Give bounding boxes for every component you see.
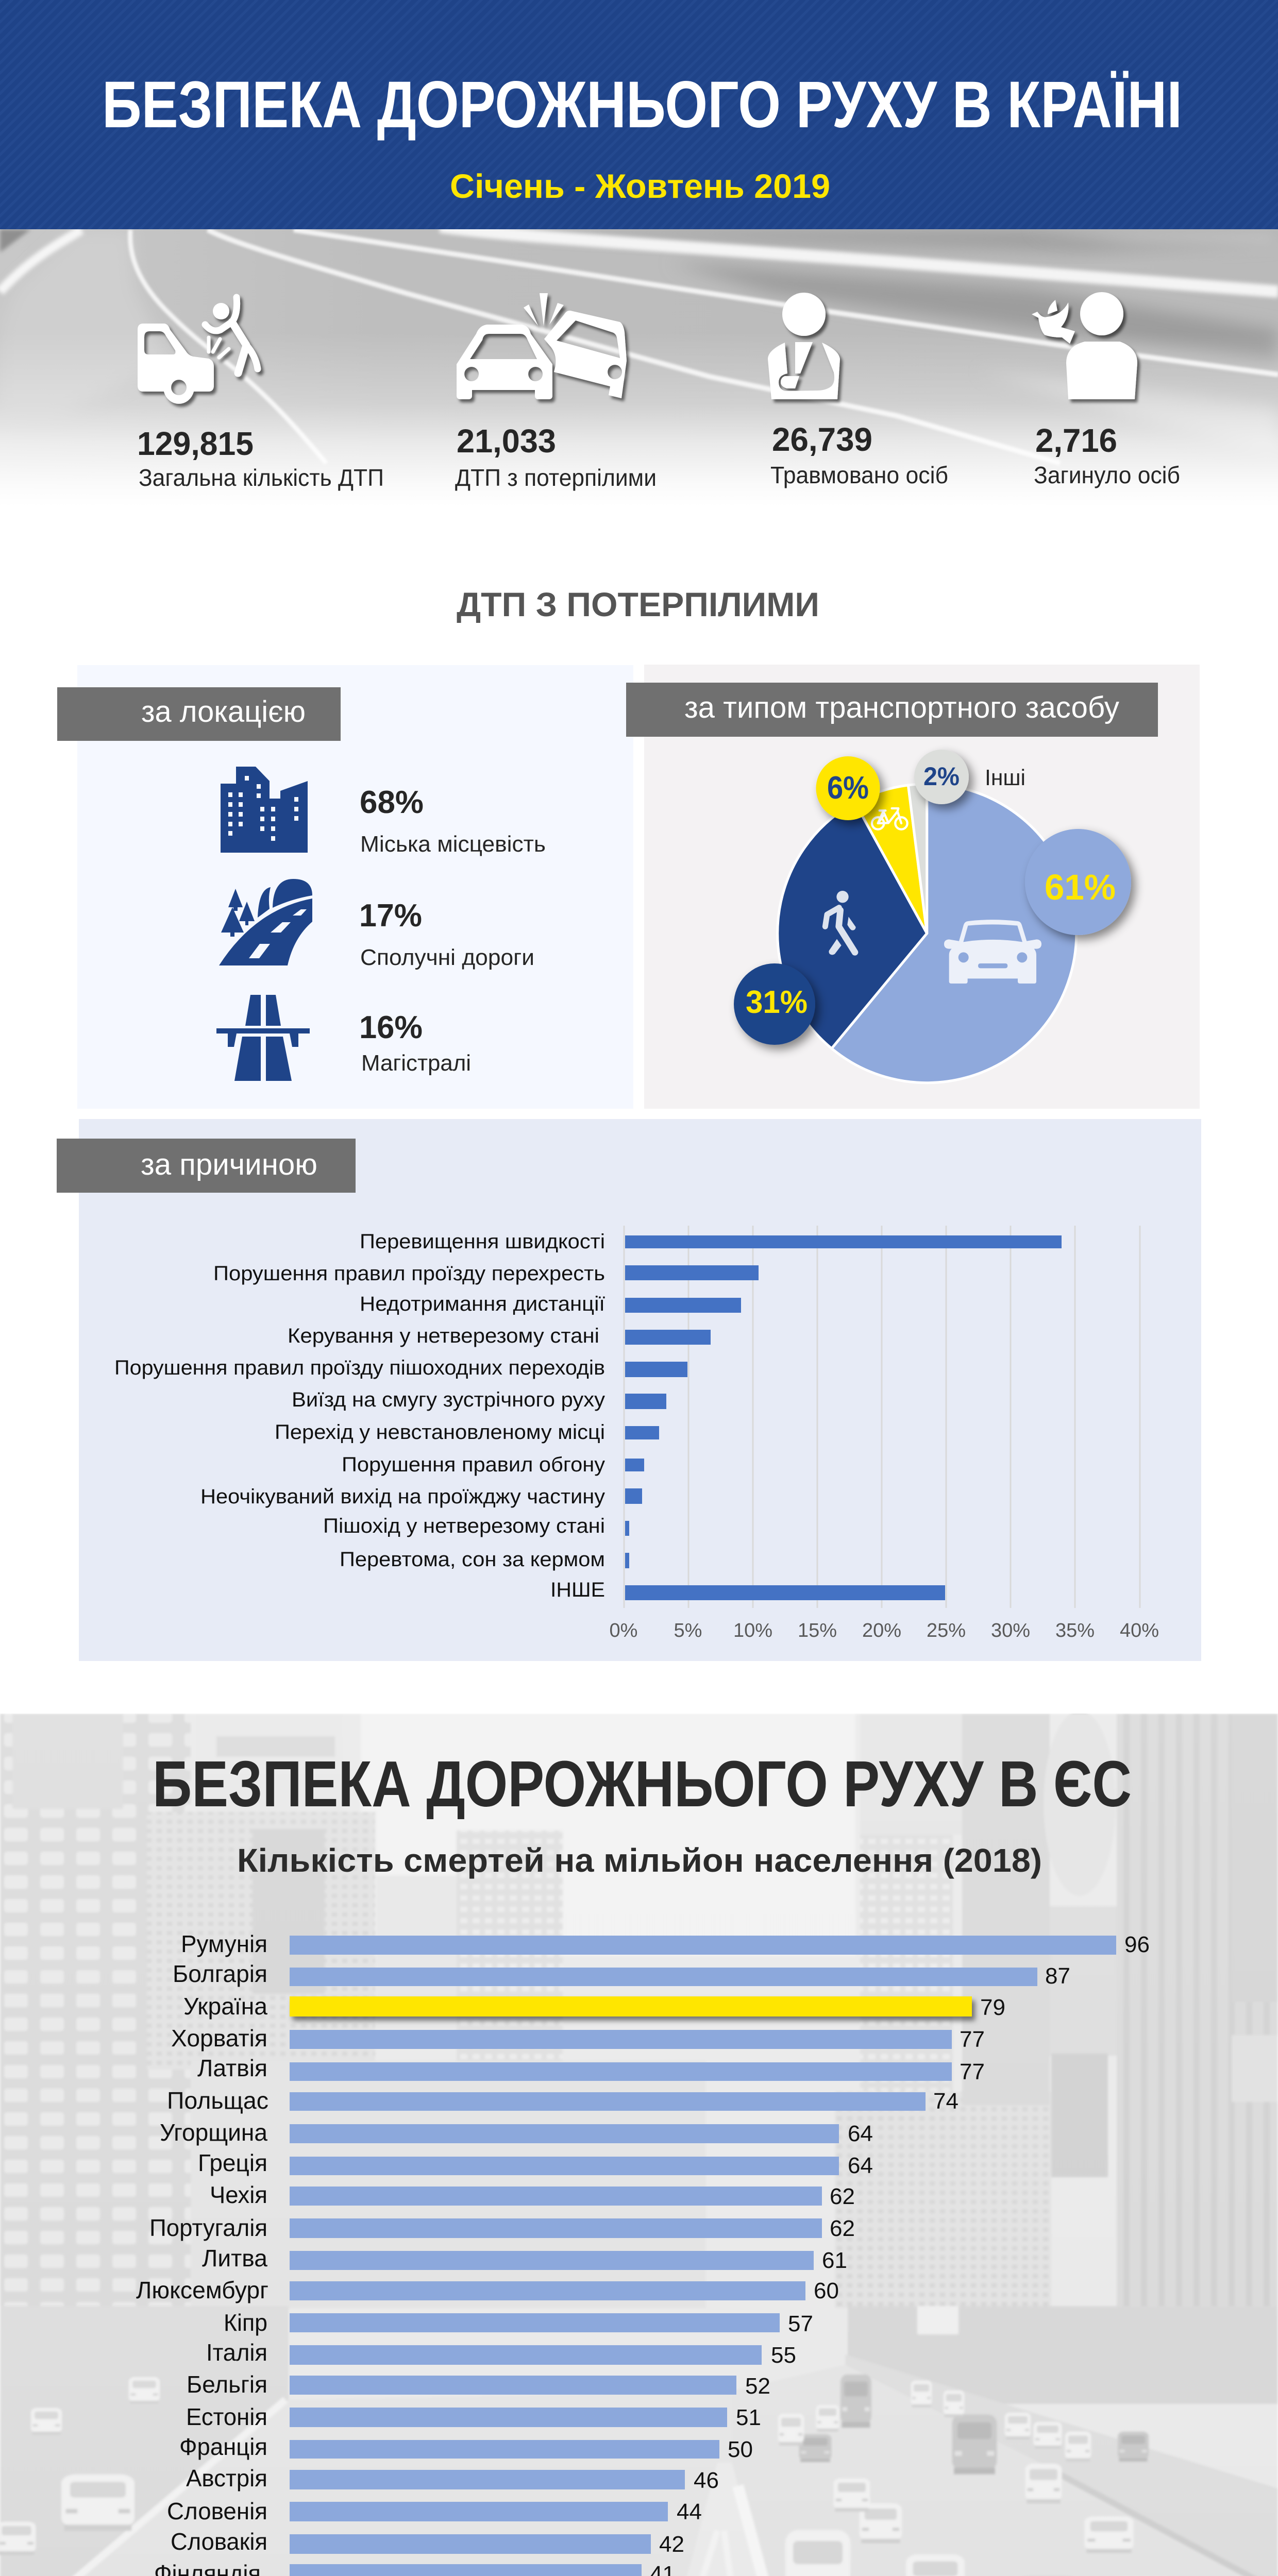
row: Czechia: Чехія bbox=[210, 2181, 267, 2208]
row: Cyprus: Кіпр bbox=[224, 2309, 267, 2336]
row: Greece: 64 bbox=[848, 2153, 873, 2178]
row: Lithuania bbox=[202, 2245, 847, 2273]
bar chart: causes: 10% bbox=[733, 1620, 772, 1641]
row: Bulgaria bbox=[173, 1960, 1070, 1989]
bar chart: causes: 0% bbox=[610, 1620, 637, 1641]
callout: 31% bbox=[734, 963, 815, 1045]
icon: person with arm sling bbox=[768, 293, 840, 399]
bar chart: causes: Керування у нетверезому стані bbox=[288, 1325, 599, 1347]
header banner bbox=[0, 0, 1278, 229]
row: Luxembourg: Люксембург bbox=[136, 2277, 268, 2303]
row: Hungary: Угорщина bbox=[160, 2119, 267, 2146]
pie chart bbox=[778, 784, 1077, 1083]
row: Bulgaria: Болгарія bbox=[173, 1960, 267, 1987]
stat: accidents with victims bbox=[455, 293, 657, 491]
road photo background bbox=[0, 229, 1278, 477]
city photo background bbox=[0, 1710, 1278, 2576]
panel heading bar bbox=[57, 1139, 356, 1193]
row: Belgium: Бельгія bbox=[187, 2371, 267, 2398]
callout: 6% bbox=[816, 756, 880, 820]
number: 26,739 bbox=[772, 421, 872, 458]
bar chart: causes: 20% bbox=[862, 1620, 901, 1641]
caption: ДТП з потерпілими bbox=[455, 464, 657, 491]
number: 2,716 bbox=[1035, 422, 1117, 459]
bar chart: causes: Порушення правил проїзду перехресть bbox=[213, 1262, 605, 1285]
row: Hungary bbox=[160, 2119, 873, 2146]
row: Romania: Румунія bbox=[181, 1930, 267, 1957]
row: Hungary: 64 bbox=[848, 2121, 873, 2146]
bar chart: causes: 15% bbox=[798, 1620, 837, 1641]
stat: total accidents bbox=[137, 297, 384, 491]
panel: by location bbox=[57, 665, 633, 1109]
row: France: Франція bbox=[179, 2433, 267, 2460]
icon: bicycle bbox=[872, 808, 907, 829]
row: Poland: Польщас bbox=[167, 2087, 268, 2114]
row: Austria: 46 bbox=[694, 2468, 719, 2493]
bar chart: causes: Порушення правил обгону bbox=[342, 1453, 605, 1476]
row: Croatia: Хорватія bbox=[171, 2025, 267, 2052]
caption: Загальна кількість ДТП bbox=[139, 464, 384, 491]
bar chart: causes: 35% bbox=[1055, 1620, 1095, 1641]
row: Ukraine: Україна bbox=[183, 1993, 267, 2020]
row: Estonia: Естонія bbox=[186, 2403, 267, 2430]
bar chart: causes: Перевищення швидкості bbox=[360, 1230, 605, 1253]
bar chart: causes: Порушення правил проїзду пішоходних переходів bbox=[114, 1357, 605, 1379]
row: Ukraine: 79 bbox=[980, 1995, 1005, 2020]
caption: Травмовано осіб bbox=[770, 462, 948, 488]
bar chart: causes: ІНШЕ bbox=[550, 1579, 605, 1601]
row: Latvia bbox=[197, 2055, 985, 2084]
row: Italy bbox=[206, 2339, 796, 2368]
row: Croatia bbox=[171, 2025, 985, 2052]
label: urban: Міська місцевість bbox=[360, 832, 546, 857]
panel: by cause bbox=[57, 1119, 1201, 1661]
bar chart: deaths per million bbox=[95, 1930, 1150, 2576]
bar chart: causes: Виїзд на смугу зустрічного руху bbox=[292, 1388, 605, 1411]
caption: Загинуло осіб bbox=[1034, 462, 1180, 488]
bar chart: causes: 30% bbox=[991, 1620, 1030, 1641]
label: connecting roads: Сполучні дороги bbox=[360, 945, 534, 970]
panel heading bar: за причиною bbox=[141, 1148, 317, 1181]
row: Belgium: 52 bbox=[745, 2374, 770, 2399]
row: Latvia: 77 bbox=[960, 2059, 985, 2084]
icon: car bbox=[944, 920, 1041, 984]
bar chart: causes: 25% bbox=[927, 1620, 966, 1641]
stat: deaths bbox=[1032, 292, 1180, 488]
icon: city buildings bbox=[221, 767, 308, 853]
bar chart: causes: Перевтома, сон за кермом bbox=[340, 1548, 605, 1571]
row: Portugal bbox=[149, 2214, 855, 2241]
row: Poland: 74 bbox=[933, 2089, 959, 2114]
label: highways: Магістралі bbox=[361, 1050, 471, 1076]
row: Croatia: 77 bbox=[960, 2027, 985, 2052]
row: Portugal: 62 bbox=[830, 2216, 855, 2241]
row: Luxembourg bbox=[136, 2277, 839, 2303]
row: Estonia bbox=[186, 2403, 761, 2430]
bar chart: causes: Пішохід у нетверезому стані bbox=[323, 1515, 605, 1537]
icon: car hitting pedestrian bbox=[138, 297, 258, 404]
row: Romania: 96 bbox=[1124, 1932, 1150, 1957]
callout: 2%: 2% bbox=[923, 762, 960, 791]
row: Finland bbox=[154, 2560, 675, 2576]
row: Portugal: Португалія bbox=[149, 2214, 267, 2241]
callout: 61% bbox=[1025, 829, 1131, 935]
row: Austria: Австрія bbox=[186, 2465, 267, 2492]
row: France: 50 bbox=[728, 2437, 753, 2462]
row: Greece: Греція bbox=[198, 2149, 267, 2176]
value: connecting roads: 17% bbox=[359, 898, 422, 934]
row: Cyprus: 57 bbox=[788, 2311, 813, 2336]
callout: 61%: 61% bbox=[1045, 867, 1116, 907]
row: France bbox=[179, 2433, 753, 2462]
row: Slovakia: 42 bbox=[659, 2532, 684, 2557]
number: 129,815 bbox=[137, 425, 254, 462]
row: Slovenia bbox=[167, 2498, 702, 2524]
row: Bulgaria: 87 bbox=[1045, 1963, 1070, 1989]
EU chart subtitle: Кількість смертей на мільйон населення (2018) bbox=[237, 1842, 1042, 1879]
stat: injured bbox=[768, 293, 948, 488]
row: Greece bbox=[198, 2149, 873, 2178]
row: Slovenia: 44 bbox=[677, 2499, 702, 2524]
row: Slovakia: Словакія bbox=[171, 2528, 267, 2555]
icon: pedestrian bbox=[825, 891, 856, 955]
section heading: ДТП З ПОТЕРПІЛИМИ bbox=[457, 585, 819, 623]
row: Lithuania: 61 bbox=[822, 2248, 847, 2273]
row: Latvia: Латвія bbox=[197, 2055, 267, 2081]
subtitle: period: Січень - Жовтень 2019 bbox=[450, 167, 830, 205]
icon: two cars crash bbox=[457, 293, 627, 399]
panel heading bar bbox=[626, 683, 1158, 737]
callout: 2% bbox=[914, 750, 969, 804]
icon: highway bbox=[216, 995, 310, 1081]
bar chart: causes bbox=[114, 1226, 1159, 1641]
row: Slovenia: Словенія bbox=[167, 2498, 267, 2524]
row: Czechia bbox=[210, 2181, 855, 2209]
row: Italy: 55 bbox=[771, 2343, 796, 2368]
bar chart: causes: Неочікуваний вихід на проїжджу частину bbox=[200, 1485, 605, 1508]
row: Cyprus bbox=[224, 2309, 813, 2336]
row: Poland bbox=[167, 2087, 959, 2114]
icon: person and dove bbox=[1032, 292, 1137, 399]
bar chart: causes: 40% bbox=[1120, 1620, 1159, 1641]
row: Belgium bbox=[187, 2371, 770, 2399]
row: Lithuania: Литва bbox=[202, 2245, 267, 2272]
row: Romania bbox=[181, 1930, 1150, 1957]
panel heading bar: за локацією bbox=[141, 695, 306, 728]
icon: connecting road bbox=[219, 879, 312, 965]
row: Czechia: 62 bbox=[830, 2184, 855, 2209]
row: Estonia: 51 bbox=[736, 2405, 761, 2430]
callout: 31%: 31% bbox=[746, 985, 808, 1020]
row: Austria bbox=[186, 2465, 719, 2493]
callout: 6%: 6% bbox=[827, 770, 869, 806]
panel heading bar bbox=[57, 687, 341, 741]
value: highways: 16% bbox=[359, 1010, 423, 1045]
value: urban: 68% bbox=[360, 785, 424, 820]
row: Luxembourg: 60 bbox=[814, 2278, 839, 2303]
row: Slovakia bbox=[171, 2528, 684, 2557]
bar chart: causes: 5% bbox=[674, 1620, 702, 1641]
panel heading bar: за типом транспортного засобу bbox=[684, 691, 1119, 724]
number: 21,033 bbox=[457, 422, 556, 460]
bar chart: causes: Перехід у невстановленому місці bbox=[275, 1421, 605, 1444]
panel: by vehicle type bbox=[626, 665, 1200, 1109]
row: Italy: Італія bbox=[206, 2339, 267, 2366]
bar chart: causes: Недотримання дистанції bbox=[360, 1293, 605, 1315]
row: Ukraine bbox=[183, 1993, 1005, 2020]
label: others: Інші bbox=[985, 765, 1025, 790]
